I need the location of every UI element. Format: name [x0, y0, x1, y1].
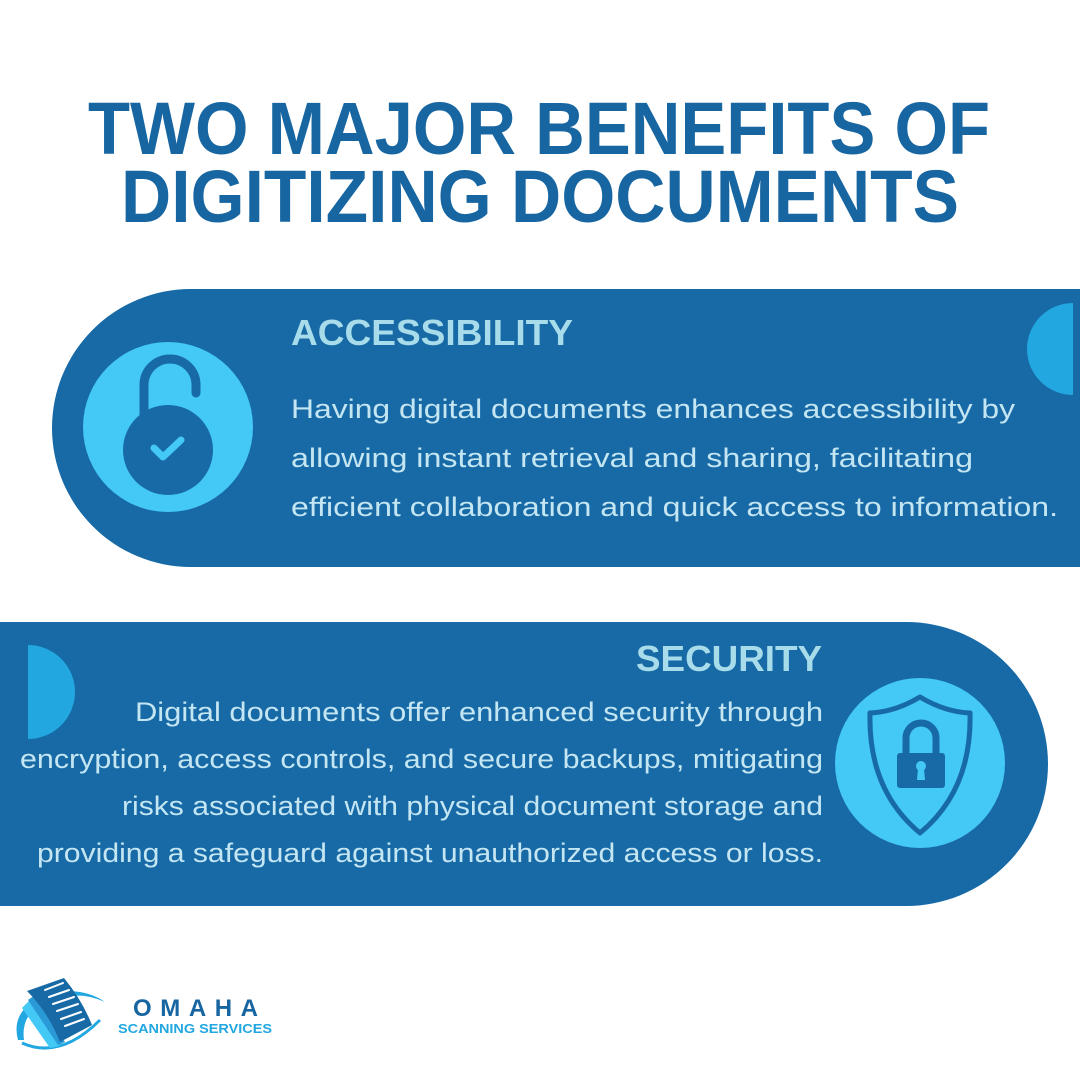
icon: shield with lock [835, 678, 1005, 848]
text: accessibility body: efficient collaboration and quick access to information. [291, 492, 1058, 522]
text: accessibility body: allowing instant retrieval and sharing, facilitating [291, 443, 973, 473]
text: OMAHA: OMAHA [133, 995, 258, 1022]
title: TWO MAJOR BENEFITS OF [88, 87, 990, 170]
title [88, 87, 990, 238]
heading: security: SECURITY [636, 638, 822, 679]
logo: Omaha Scanning Services [17, 978, 272, 1048]
text: accessibility body: Having digital documents enhances accessibility by [291, 394, 1016, 424]
text: security body: providing a safeguard against unauthorized access or loss. [37, 838, 823, 868]
decorative half circle bottom left [28, 645, 75, 739]
decorative half circle top right [1027, 303, 1073, 395]
text: SCANNING SERVICES: SCANNING SERVICES [118, 1021, 272, 1036]
text: security body: risks associated with physical document storage and [122, 791, 823, 821]
panel: accessibility [52, 289, 1080, 567]
text: security body: Digital documents offer enhanced security through [135, 697, 823, 727]
icon: unlocked padlock [83, 342, 253, 512]
panel: security [0, 622, 1048, 906]
heading: accessibility: ACCESSIBILITY [291, 312, 573, 353]
title: DIGITIZING DOCUMENTS [121, 155, 959, 238]
icon: document logo [17, 978, 105, 1048]
text: security body: encryption, access controls, and secure backups, mitigating [20, 744, 823, 774]
text: accessibility body [291, 394, 1058, 522]
text: security body [20, 697, 823, 868]
